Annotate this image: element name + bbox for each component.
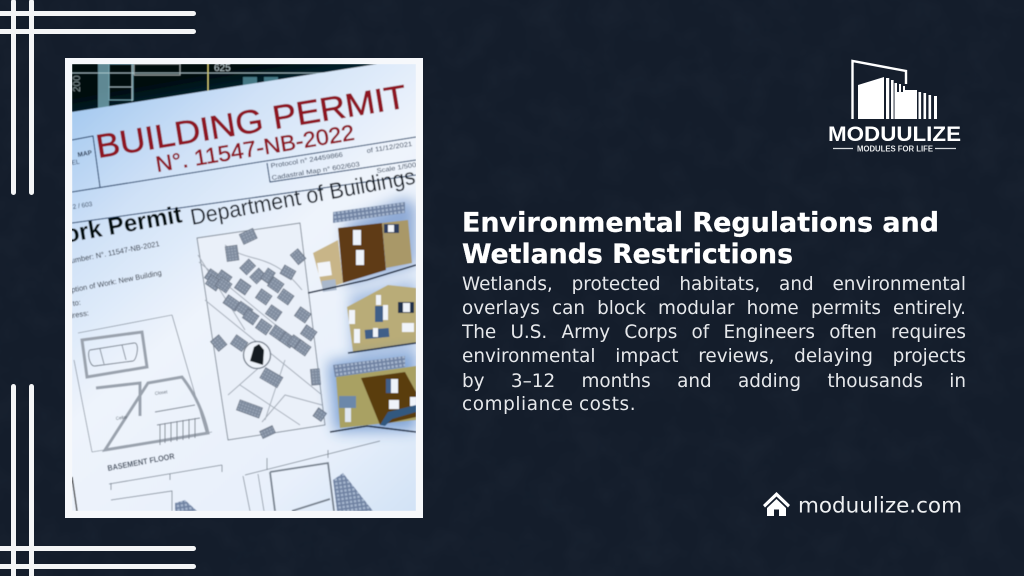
house elevation 3: [328, 350, 416, 432]
paper sheet: [72, 64, 416, 511]
form small text: Cadastral Map n° 602/603: [271, 160, 361, 182]
body paragraph: by 3–12 months and adding thousands in: [462, 371, 966, 392]
decorative lines: bottom left corner: [0, 384, 196, 576]
work permit heading: Work Permit: [41, 201, 184, 252]
logo tagline: MODULES FOR LIFE: [857, 144, 934, 154]
decorative lines: top left corner: [0, 0, 196, 195]
department heading: Department of Buildings: [188, 164, 417, 230]
house elevation 2: [347, 280, 416, 356]
photo: building permit document in white frame: [65, 58, 423, 518]
form small text: Protocol n° 24459866: [270, 151, 344, 170]
form details: Number: N°. 11547-NB-2021: [65, 239, 160, 266]
form small text: of 11/12/2021: [366, 141, 413, 155]
body paragraph: environmental impact reviews, delaying projects: [462, 346, 966, 367]
icon: home: [763, 492, 790, 516]
basement floor plan: [96, 377, 208, 450]
body paragraph: The U.S. Army Corps of Engineers often requires: [462, 322, 966, 343]
roof tile patches: [175, 473, 373, 511]
form details: to:: [72, 298, 82, 308]
body paragraph: compliance costs.: [462, 394, 636, 415]
white frame: [65, 58, 423, 518]
garage floor plan: [74, 315, 212, 452]
form details: Address:: [59, 308, 90, 322]
dark blueprint behind the permit: [72, 64, 376, 113]
form small text: 2 / 603: [72, 201, 93, 211]
form small text: Scale 1/500: [376, 162, 417, 175]
website link: moduulize.com: [798, 494, 962, 518]
permit title: BUILDING PERMIT: [93, 78, 409, 165]
form small text: EL: [71, 159, 81, 167]
body paragraph: [462, 274, 966, 415]
house elevation 1: [308, 198, 416, 293]
dark blueprint behind the permit: 200: [72, 75, 83, 92]
basement floor label: BASEMENT FLOOR: [107, 452, 175, 473]
dark blueprint behind the permit: 625: [214, 63, 231, 74]
logo wordmark: MODUULIZE: [828, 123, 961, 146]
site map: [197, 223, 327, 440]
permit number: N°. 11547-NB-2022: [154, 120, 356, 177]
form details: Description of Work: New Building: [49, 268, 162, 299]
highlighted plot marker: [244, 342, 270, 368]
body paragraph: Wetlands, protected habitats, and environmental: [462, 274, 966, 295]
logo mark: building: [852, 61, 937, 119]
form details: [72, 240, 162, 319]
basement floor plan: Closet: [154, 389, 169, 396]
form table lines: [72, 136, 416, 223]
body paragraph: overlays can block modular home permits entirely.: [462, 298, 966, 319]
heading: Environmental Regulations and: [462, 208, 939, 238]
form small text: [71, 141, 417, 211]
form small text: MAP: [77, 149, 93, 159]
basement floor plan: Cellar: [115, 414, 128, 421]
lower floor plans: [72, 441, 380, 511]
heading: [462, 208, 939, 270]
heading: Wetlands Restrictions: [462, 239, 793, 270]
